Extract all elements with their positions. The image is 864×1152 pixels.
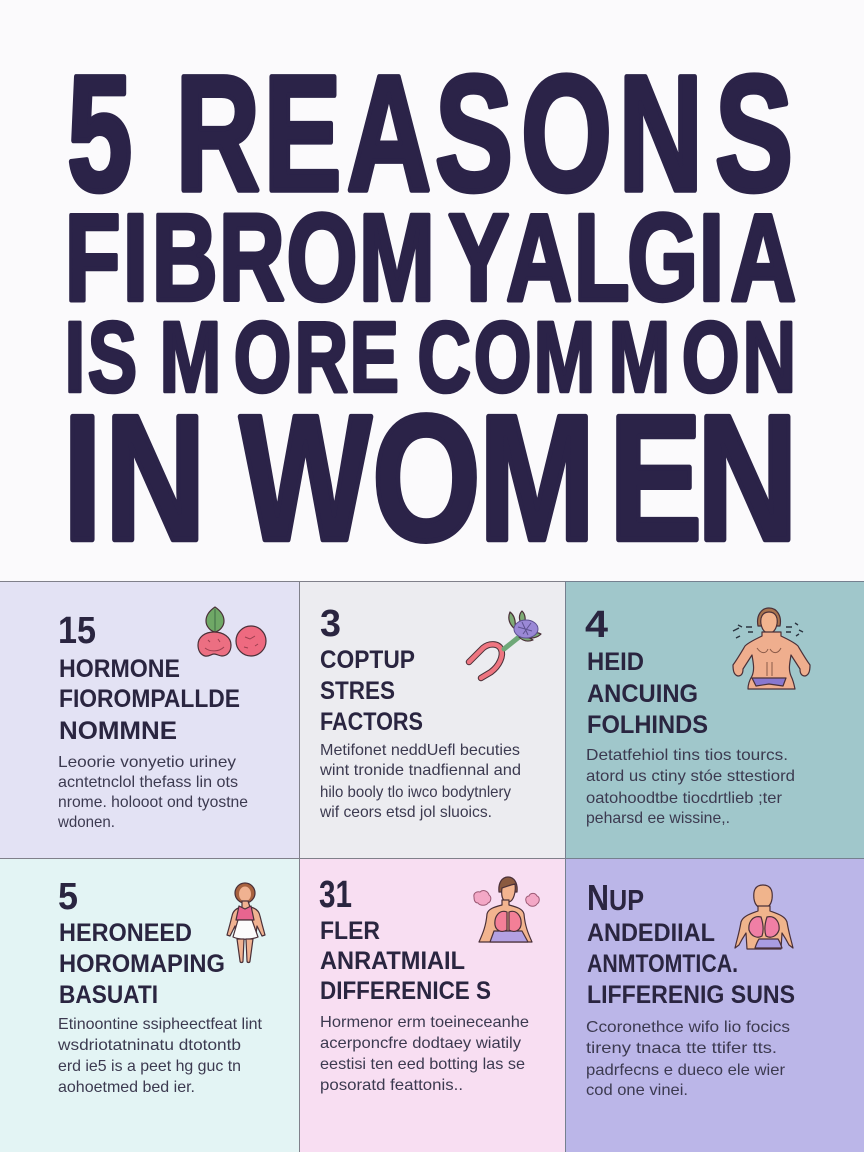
heading: anatomical differences: DIFFERENICE S bbox=[320, 977, 491, 1005]
heading: anatomical sums bbox=[587, 919, 795, 1009]
body text: head and aching: atord us ctiny stóe sttestiord bbox=[586, 768, 795, 785]
heading: anatomical sums: ANDEDIIAL bbox=[587, 919, 715, 947]
number 31: 31 bbox=[319, 874, 352, 916]
body text: head and aching: peharsd ee wissine,. bbox=[586, 810, 730, 827]
icon: standing woman bbox=[227, 883, 265, 962]
heading: stress: FACTORS bbox=[320, 708, 423, 736]
body text: stress bbox=[319, 742, 521, 821]
body text: hormone: Leoorie vonyetio uriney bbox=[58, 754, 236, 771]
number 15: 15 bbox=[58, 610, 96, 652]
heading: hormone: FIOROMPALLDE bbox=[59, 685, 240, 713]
body text: stress: wif ceors etsd jol sluoics. bbox=[319, 804, 492, 821]
icon: woman's torso with aches bbox=[733, 608, 810, 689]
number 3: 3 bbox=[320, 603, 341, 645]
number 4: 4 bbox=[585, 604, 608, 646]
body text: hormone bbox=[57, 754, 248, 831]
panel: stress bbox=[300, 582, 566, 858]
heading: stress: STRES bbox=[320, 677, 395, 705]
body text: anatomical differences: posoratd feattonis.. bbox=[320, 1077, 463, 1094]
body text: stress: hilo booly tlo iwco bodytnlery bbox=[320, 784, 511, 801]
body text: hormone: nrome. holooot ond tyostne bbox=[58, 794, 248, 811]
title: 5 REASONS bbox=[67, 42, 793, 226]
body text: hormonal changes: aohoetmed bed ier. bbox=[58, 1079, 195, 1096]
heading: hormonal changes bbox=[59, 919, 225, 1009]
panel: anatomical sums bbox=[566, 858, 864, 1152]
heading: stress: COPTUP bbox=[320, 646, 415, 674]
heading: hormone bbox=[59, 655, 240, 745]
title: IS MORE COMMON bbox=[65, 301, 796, 413]
body text: anatomical sums: padrfecns e dueco ele wier bbox=[586, 1062, 786, 1079]
body text: anatomical sums bbox=[586, 1019, 790, 1099]
heading: anatomical differences: ANRATMIAIL bbox=[320, 947, 465, 975]
heading: head and aching: FOLHINDS bbox=[587, 711, 708, 739]
body text: anatomical sums: tireny tnaca tte ttifer tts. bbox=[586, 1040, 777, 1057]
heading: hormone: NOMMNE bbox=[59, 717, 177, 745]
body text: stress: wint tronide tnadfiennal and bbox=[319, 762, 521, 779]
heading: hormonal changes: HERONEED bbox=[59, 919, 192, 947]
heading: head and aching: ANCUING bbox=[587, 680, 698, 708]
heading: head and aching: HEID bbox=[587, 648, 644, 676]
panel: hormonal changes bbox=[0, 858, 300, 1152]
number NUP: N bbox=[587, 877, 609, 918]
body text: head and aching: Detatfehiol tins tios tourcs. bbox=[586, 747, 788, 764]
heading: anatomical differences: FLER bbox=[320, 917, 380, 945]
title: FIBROMYALGIA bbox=[65, 188, 796, 326]
title: IN WOMEN bbox=[63, 378, 798, 577]
heading: hormonal changes: HOROMAPING bbox=[59, 950, 225, 978]
body text: anatomical differences: Hormenor erm toeineceanhe bbox=[320, 1014, 529, 1031]
body text: hormone: wdonen. bbox=[57, 814, 115, 831]
body text: hormonal changes: Etinoontine ssipheectfeat lint bbox=[58, 1016, 263, 1033]
heading: anatomical sums: LIFFERENIG SUNS bbox=[587, 981, 795, 1009]
heading: stress bbox=[320, 646, 423, 736]
icon: torso with lungs bbox=[735, 885, 793, 949]
heading: head and aching bbox=[587, 648, 708, 739]
icon: torso with lungs and clouds bbox=[474, 877, 539, 942]
body text: anatomical differences bbox=[320, 1014, 529, 1094]
body text: anatomical sums: cod one vinei. bbox=[586, 1082, 688, 1099]
body text: hormonal changes: wsdriotatninatu dtotontb bbox=[57, 1037, 241, 1054]
body text: stress: Metifonet neddUefl becuties bbox=[320, 742, 520, 759]
body text: hormonal changes: erd ie5 is a peet hg guc tn bbox=[58, 1058, 241, 1075]
panel: hormone bbox=[0, 582, 300, 858]
body text: anatomical sums: Ccoronethce wifo lio focics bbox=[586, 1019, 790, 1036]
icon: wishbone and flower bbox=[469, 611, 541, 678]
panel: head and aching bbox=[566, 582, 864, 858]
number NUP bbox=[587, 877, 644, 918]
body text: anatomical differences: eestisi ten eed botting las se bbox=[320, 1056, 525, 1073]
body text: hormone: acntetnclol thefass lin ots bbox=[58, 774, 238, 791]
title bbox=[63, 42, 798, 577]
number NUP: UP bbox=[609, 885, 644, 917]
heading: hormone: HORMONE bbox=[59, 655, 180, 683]
heading: anatomical differences bbox=[320, 917, 491, 1005]
body text: head and aching: oatohoodtbe tiocdrtlieb ;ter bbox=[586, 790, 783, 807]
body text: hormonal changes bbox=[57, 1016, 263, 1096]
heading: anatomical sums: ANMTOMTICA. bbox=[587, 950, 738, 978]
heading: hormonal changes: BASUATI bbox=[59, 981, 158, 1009]
icon: fruit and leaf bbox=[198, 607, 266, 656]
panel: anatomical differences bbox=[300, 858, 566, 1152]
body text: head and aching bbox=[586, 747, 795, 827]
body text: anatomical differences: acerponcfre dodtaey wiatily bbox=[320, 1035, 521, 1052]
number 5: 5 bbox=[58, 876, 78, 918]
